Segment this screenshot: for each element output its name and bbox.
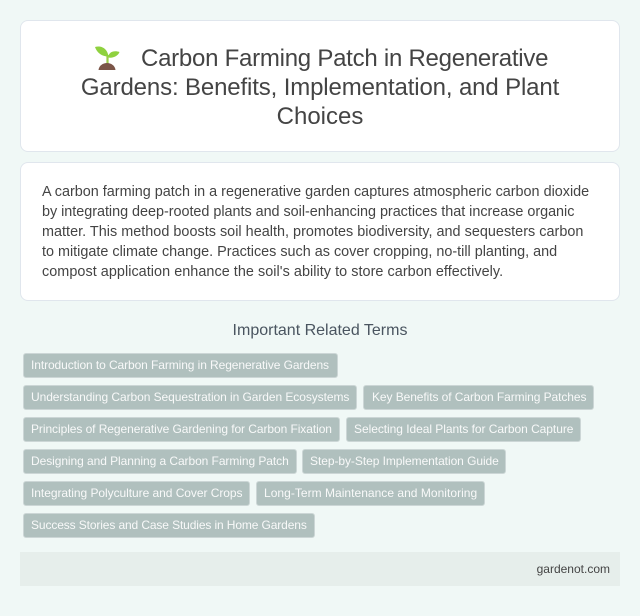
tag <box>23 417 340 442</box>
tag <box>23 513 315 538</box>
description text: by integrating deep-rooted plants and soil-enhancing practices that increase organic <box>42 204 574 220</box>
tag <box>302 449 506 474</box>
tag: Integrating Polyculture and Cover Crops <box>31 486 242 500</box>
tag <box>363 385 594 410</box>
tag: Key Benefits of Carbon Farming Patches <box>372 390 586 404</box>
title text: Gardens: Benefits, Implementation, and Plant <box>81 74 559 101</box>
description card <box>20 162 620 301</box>
tag: Principles of Regenerative Gardening for Carbon Fixation <box>31 422 332 436</box>
tag: Step-by-Step Implementation Guide <box>310 454 499 468</box>
title text: Choices <box>277 103 363 130</box>
heading: important related terms: Important Related Terms <box>233 322 407 339</box>
title card <box>20 20 620 152</box>
tag: Selecting Ideal Plants for Carbon Capture <box>354 422 573 436</box>
description text: to mitigate climate change. Practices such as cover cropping, no-till planting, and <box>42 244 557 260</box>
tag <box>23 449 297 474</box>
tag: Introduction to Carbon Farming in Regenerative Gardens <box>31 358 329 372</box>
tag list <box>23 353 594 538</box>
tag: Success Stories and Case Studies in Home Gardens <box>31 518 307 532</box>
description text <box>42 184 589 280</box>
description text: compost application enhance the soil's ability to store carbon effectively. <box>42 264 503 280</box>
tag <box>256 481 485 506</box>
tag <box>23 481 250 506</box>
description text: A carbon farming patch in a regenerative garden captures atmospheric carbon dioxide <box>42 184 589 200</box>
icon: sprout <box>95 46 120 70</box>
footer text: gardenot.com <box>537 562 610 576</box>
tag: Long-Term Maintenance and Monitoring <box>264 486 477 500</box>
tag <box>23 385 357 410</box>
tag <box>23 353 338 378</box>
footer bar <box>20 552 620 586</box>
tag: Understanding Carbon Sequestration in Garden Ecosystems <box>31 390 349 404</box>
description text: matter. This method boosts soil health, promotes biodiversity, and sequesters carbon <box>42 224 583 240</box>
title text: Carbon Farming Patch in Regenerative <box>141 45 548 72</box>
tag: Designing and Planning a Carbon Farming Patch <box>31 454 289 468</box>
tag <box>346 417 581 442</box>
title text <box>81 45 560 130</box>
